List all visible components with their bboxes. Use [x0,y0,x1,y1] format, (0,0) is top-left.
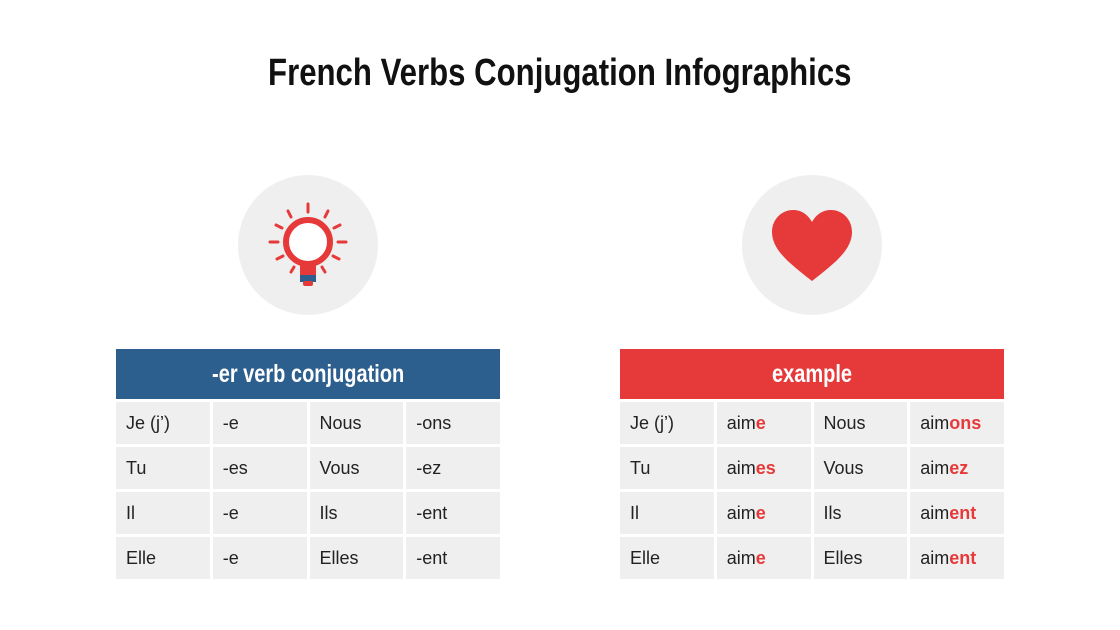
table: -er verb conjugation: Je (j’) [126,413,170,433]
table: example: Vous [824,458,864,478]
table: example: aiment [920,548,976,568]
table: example: Elles [824,548,863,568]
table: example: Nous [824,413,866,433]
icon: heart [742,175,882,315]
table: -er verb conjugation: Ils [320,503,338,523]
table: -er verb conjugation: -ons [416,413,451,433]
table: example: Tu [630,458,650,478]
table: -er verb conjugation [116,349,500,579]
table: example: aime [727,548,766,568]
title: French Verbs Conjugation Infographics [268,52,852,94]
table: -er verb conjugation: -e [223,413,239,433]
table: example: Ils [824,503,842,523]
table: -er verb conjugation: -er verb conjugation [212,360,404,388]
table: -er verb conjugation: Nous [320,413,362,433]
table: -er verb conjugation: -e [223,503,239,523]
table: example: aiment [920,503,976,523]
table: example: example [772,360,852,388]
table: -er verb conjugation: -es [223,458,248,478]
table: -er verb conjugation: -e [223,548,239,568]
table: example: aime [727,413,766,433]
table: -er verb conjugation: Il [126,503,135,523]
table: example: Elle [630,548,660,568]
table: example: aimons [920,413,981,433]
table: -er verb conjugation: -ez [416,458,441,478]
table: -er verb conjugation: Elle [126,548,156,568]
table: example: aimez [920,458,968,478]
table: example: Il [630,503,639,523]
table: example: Je (j’) [630,413,674,433]
table: -er verb conjugation: Vous [320,458,360,478]
table: -er verb conjugation: Tu [126,458,146,478]
table: example [620,349,1004,579]
table: example: aime [727,503,766,523]
icon: lightbulb [238,175,378,315]
table: -er verb conjugation: -ent [416,503,447,523]
table: -er verb conjugation: Elles [320,548,359,568]
table: example: aimes [727,458,776,478]
table: -er verb conjugation: -ent [416,548,447,568]
